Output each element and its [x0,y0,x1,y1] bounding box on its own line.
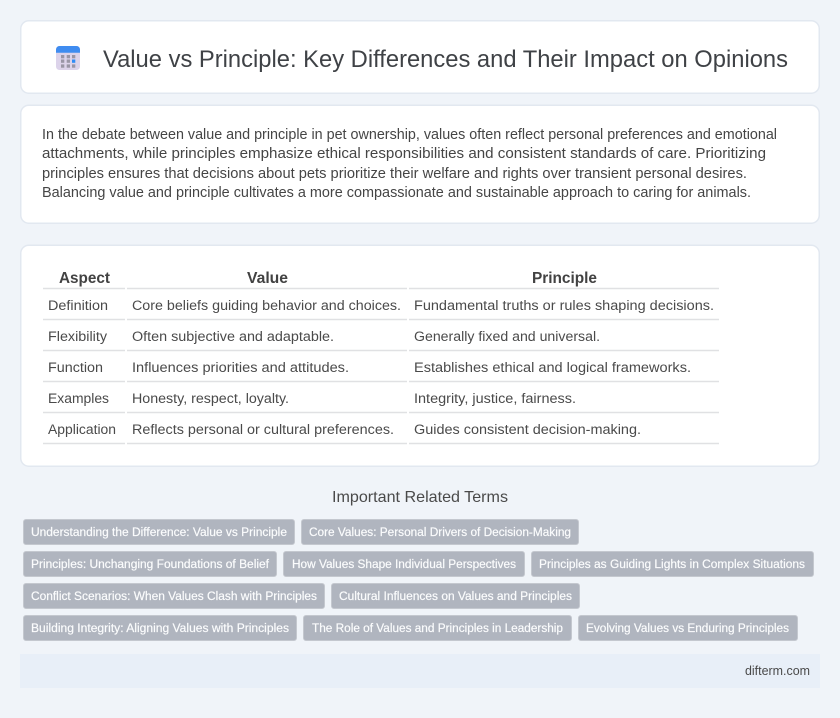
table header [59,270,597,287]
row: function: Establishes ethical and logical frameworks. [414,360,691,376]
row: flexibility: Flexibility [48,329,108,345]
tag [284,552,524,576]
row: application: Guides consistent decision-making. [414,422,641,438]
panel: header [21,21,819,93]
title: Value vs Principle: Key Differences and Their Impact on Opinions [103,46,788,73]
row: application [48,422,641,438]
row: function: Function [48,360,103,376]
text block: intro: principles ensures that decisions about pets prioritize their welfare and rights over transient personal desires. [42,166,747,182]
text block: intro: attachments, while principles emphasize ethical responsibilities and consistent standards of care. Prioritizing [42,146,766,162]
row: examples: Integrity, justice, fairness. [414,391,576,407]
tag [304,616,572,640]
tag: Understanding the Difference: Value vs Principle [31,525,287,539]
row: flexibility [48,329,600,345]
footer text: site name: difterm.com [745,663,810,678]
row: examples [48,391,576,407]
tag [332,584,580,608]
text block: intro [42,127,777,201]
row: flexibility: Generally fixed and universal. [414,329,600,345]
tag [24,520,294,544]
tag: Principles: Unchanging Foundations of Belief [31,557,270,571]
row: examples: Examples [48,391,109,407]
table header: Aspect [59,270,110,287]
table header: Principle [532,270,597,287]
heading: important related terms: Important Related Terms [332,489,508,506]
table header: Value [247,270,288,287]
footer [20,654,820,688]
tag: Cultural Influences on Values and Principles [339,589,572,603]
row: flexibility: Often subjective and adaptable. [132,329,334,345]
row: definition [48,298,714,314]
row: definition: Fundamental truths or rules shaping decisions. [414,298,714,314]
tag: The Role of Values and Principles in Leadership [312,621,563,635]
tag: How Values Shape Individual Perspectives [292,557,516,571]
tag: Principles as Guiding Lights in Complex Situations [539,557,805,571]
row: definition: Definition [48,298,108,314]
row: function: Influences priorities and attitudes. [132,360,349,376]
tag [578,616,798,640]
text block: intro: In the debate between value and principle in pet ownership, values often reflect personal preferences and emotional [42,127,777,143]
tag [24,584,324,608]
row: application: Application [48,422,116,438]
tag [302,520,578,544]
tag [24,552,276,576]
tag: Conflict Scenarios: When Values Clash with Principles [31,589,317,603]
row: examples: Honesty, respect, loyalty. [132,391,289,407]
row: application: Reflects personal or cultural preferences. [132,422,394,438]
tag [24,616,296,640]
tag: Evolving Values vs Enduring Principles [586,621,789,635]
panel: intro paragraph [21,105,819,223]
tag: Building Integrity: Aligning Values with Principles [31,621,289,635]
tag: Core Values: Personal Drivers of Decision-Making [309,525,571,539]
tag [532,552,814,576]
text block: intro: Balancing value and principle cultivates a more compassionate and sustainable approach to caring for animals. [42,185,751,201]
row: definition: Core beliefs guiding behavior and choices. [132,298,401,314]
panel: comparison table [21,245,819,466]
icon: calendar [56,46,80,70]
tag list [24,520,814,640]
row: function [48,360,691,376]
